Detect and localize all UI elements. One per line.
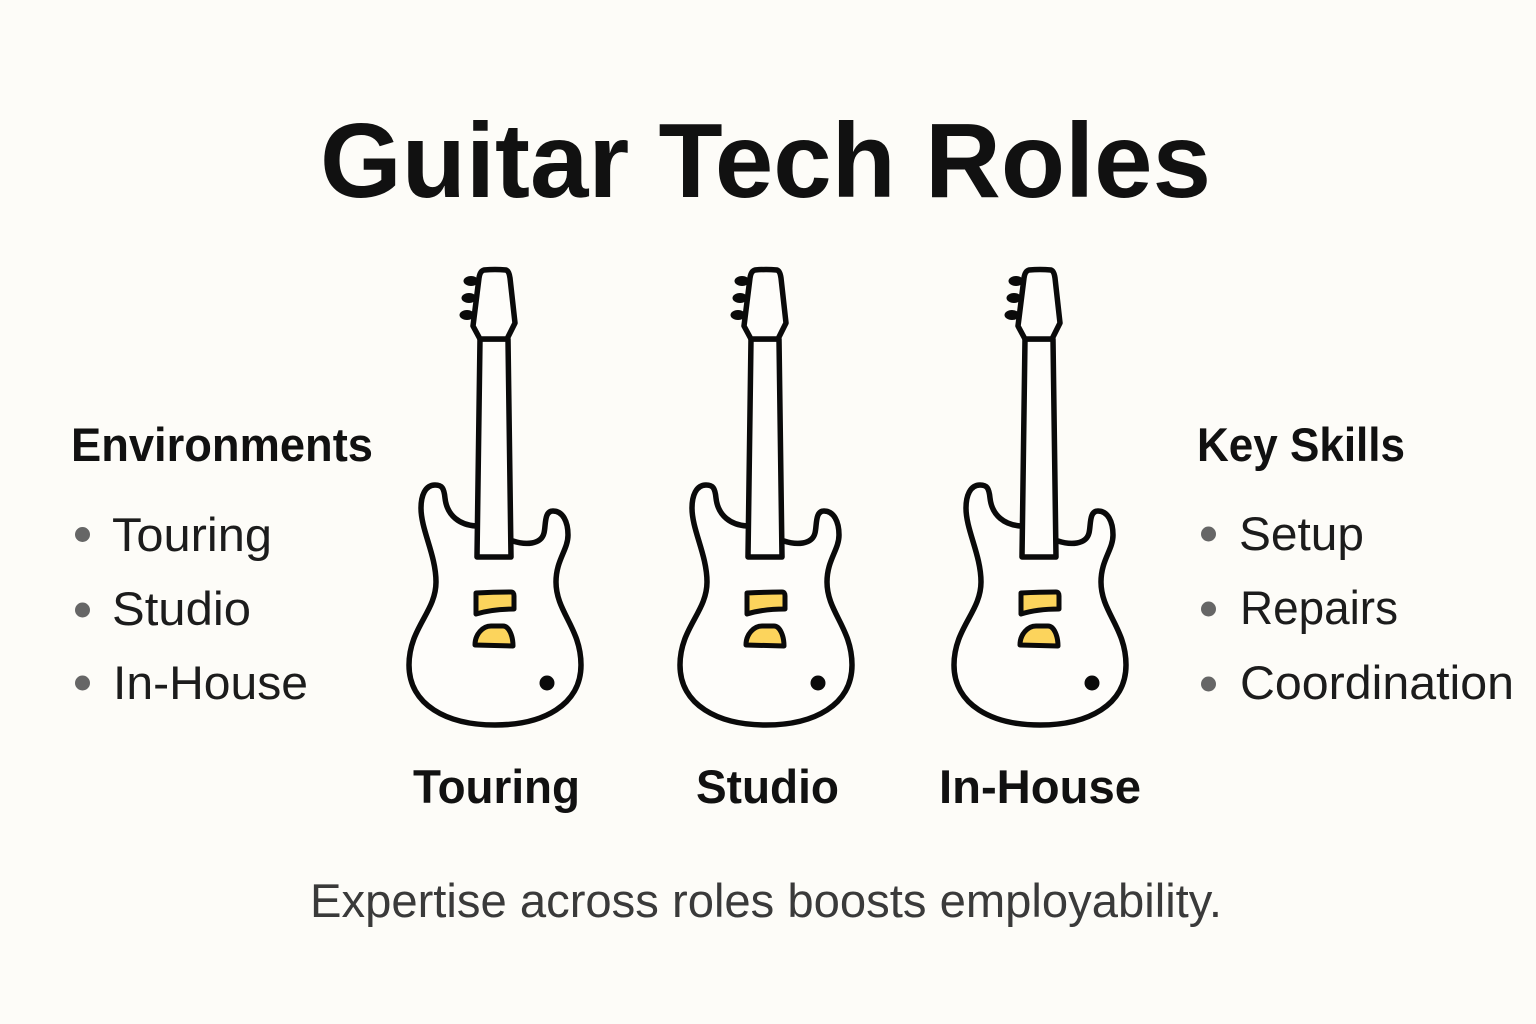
panel: environments: [71, 418, 373, 709]
heading: key skills: Key Skills: [1197, 418, 1405, 471]
list item: coordination: Coordination: [1240, 656, 1514, 709]
list item: repairs: Repairs: [1240, 581, 1398, 634]
panel: key skills: [1197, 418, 1514, 709]
list item: in-house: In-House: [113, 656, 308, 709]
list item: touring: Touring: [112, 508, 272, 561]
guitar: studio: [680, 270, 852, 725]
heading: environments: Environments: [71, 418, 373, 471]
caption: Expertise across roles boosts employability.: [310, 874, 1222, 927]
list item: studio: Studio: [112, 582, 251, 635]
title: Guitar Tech Roles: [320, 102, 1211, 220]
list item: setup: Setup: [1239, 507, 1364, 560]
guitar: in-house: [954, 270, 1126, 725]
guitar: touring: [409, 270, 581, 725]
label: studio: Studio: [696, 760, 839, 813]
label: in-house: In-House: [939, 760, 1141, 813]
label: touring: Touring: [413, 760, 580, 813]
